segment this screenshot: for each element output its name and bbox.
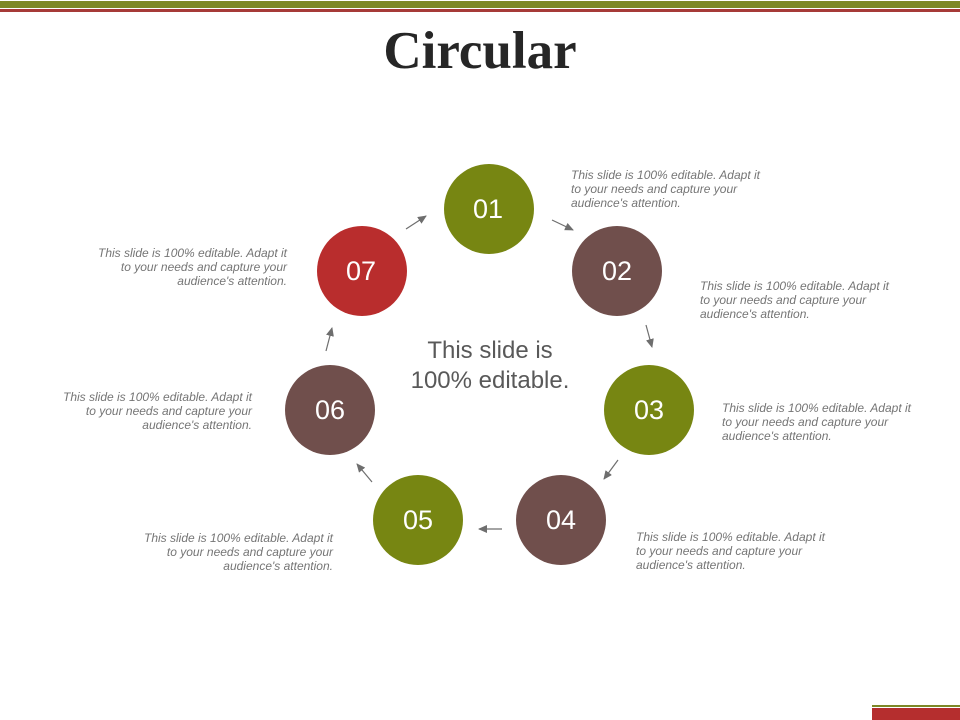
step 02 [572,226,662,316]
text: step 07: to your needs and capture your [121,260,287,274]
text: step 06: audience's attention. [142,418,252,432]
title: Circular [383,22,577,80]
text: step 02: audience's attention. [700,307,810,321]
arrow 05 to 06 [357,464,372,482]
text: step 05: to your needs and capture your [167,545,333,559]
text: step 05: This slide is 100% editable. Adapt it [144,531,333,545]
step 07: 07 [346,256,376,286]
step 05: 05 [403,505,433,535]
text: step 03: to your needs and capture your [722,415,888,429]
text: step 07 [98,246,288,288]
text: step 01: This slide is 100% editable. Adapt it [571,168,760,182]
text: step 03: This slide is 100% editable. Adapt it [722,401,911,415]
step 06: 06 [315,395,345,425]
text: step 01: audience's attention. [571,196,681,210]
text: step 07: audience's attention. [177,274,287,288]
text: step 06: This slide is 100% editable. Adapt it [63,390,252,404]
text: step 02: This slide is 100% editable. Adapt it [700,279,889,293]
text: step 04: to your needs and capture your [636,544,802,558]
text: step 06 [63,390,252,432]
step 01 [444,164,534,254]
text: step 03: audience's attention. [722,429,832,443]
text: step 02: to your needs and capture your [700,293,866,307]
text: step 06: to your needs and capture your [86,404,252,418]
step 01: 01 [473,194,503,224]
arrow 02 to 03 [646,325,652,347]
center text [411,337,569,394]
bottom olive bar [872,705,960,707]
step 02: 02 [602,256,632,286]
arrow 07 to 01 [406,216,426,229]
arrow 06 to 07 [326,328,332,351]
text: step 05: audience's attention. [223,559,333,573]
text: step 04 [636,530,826,572]
step 07 [317,226,407,316]
bottom red block [872,708,960,720]
center text: This slide is [427,337,553,364]
center text: 100% editable. [411,367,569,394]
text: step 03 [722,401,912,443]
text: step 01 [571,168,760,210]
step 06 [285,365,375,455]
step 04: 04 [546,505,576,535]
step 03: 03 [634,395,664,425]
arrow 04 to 05 [479,528,502,530]
arrow 03 to 04 [604,460,618,479]
text: step 04: audience's attention. [636,558,746,572]
text: step 02 [700,279,890,321]
top olive bar [0,1,960,8]
text: step 01: to your needs and capture your [571,182,737,196]
step 05 [373,475,463,565]
step 04 [516,475,606,565]
text: step 05 [144,531,334,573]
step 03 [604,365,694,455]
arrow 01 to 02 [552,220,573,230]
text: step 04: This slide is 100% editable. Adapt it [636,530,825,544]
top red bar [0,9,960,12]
text: step 07: This slide is 100% editable. Adapt it [98,246,287,260]
